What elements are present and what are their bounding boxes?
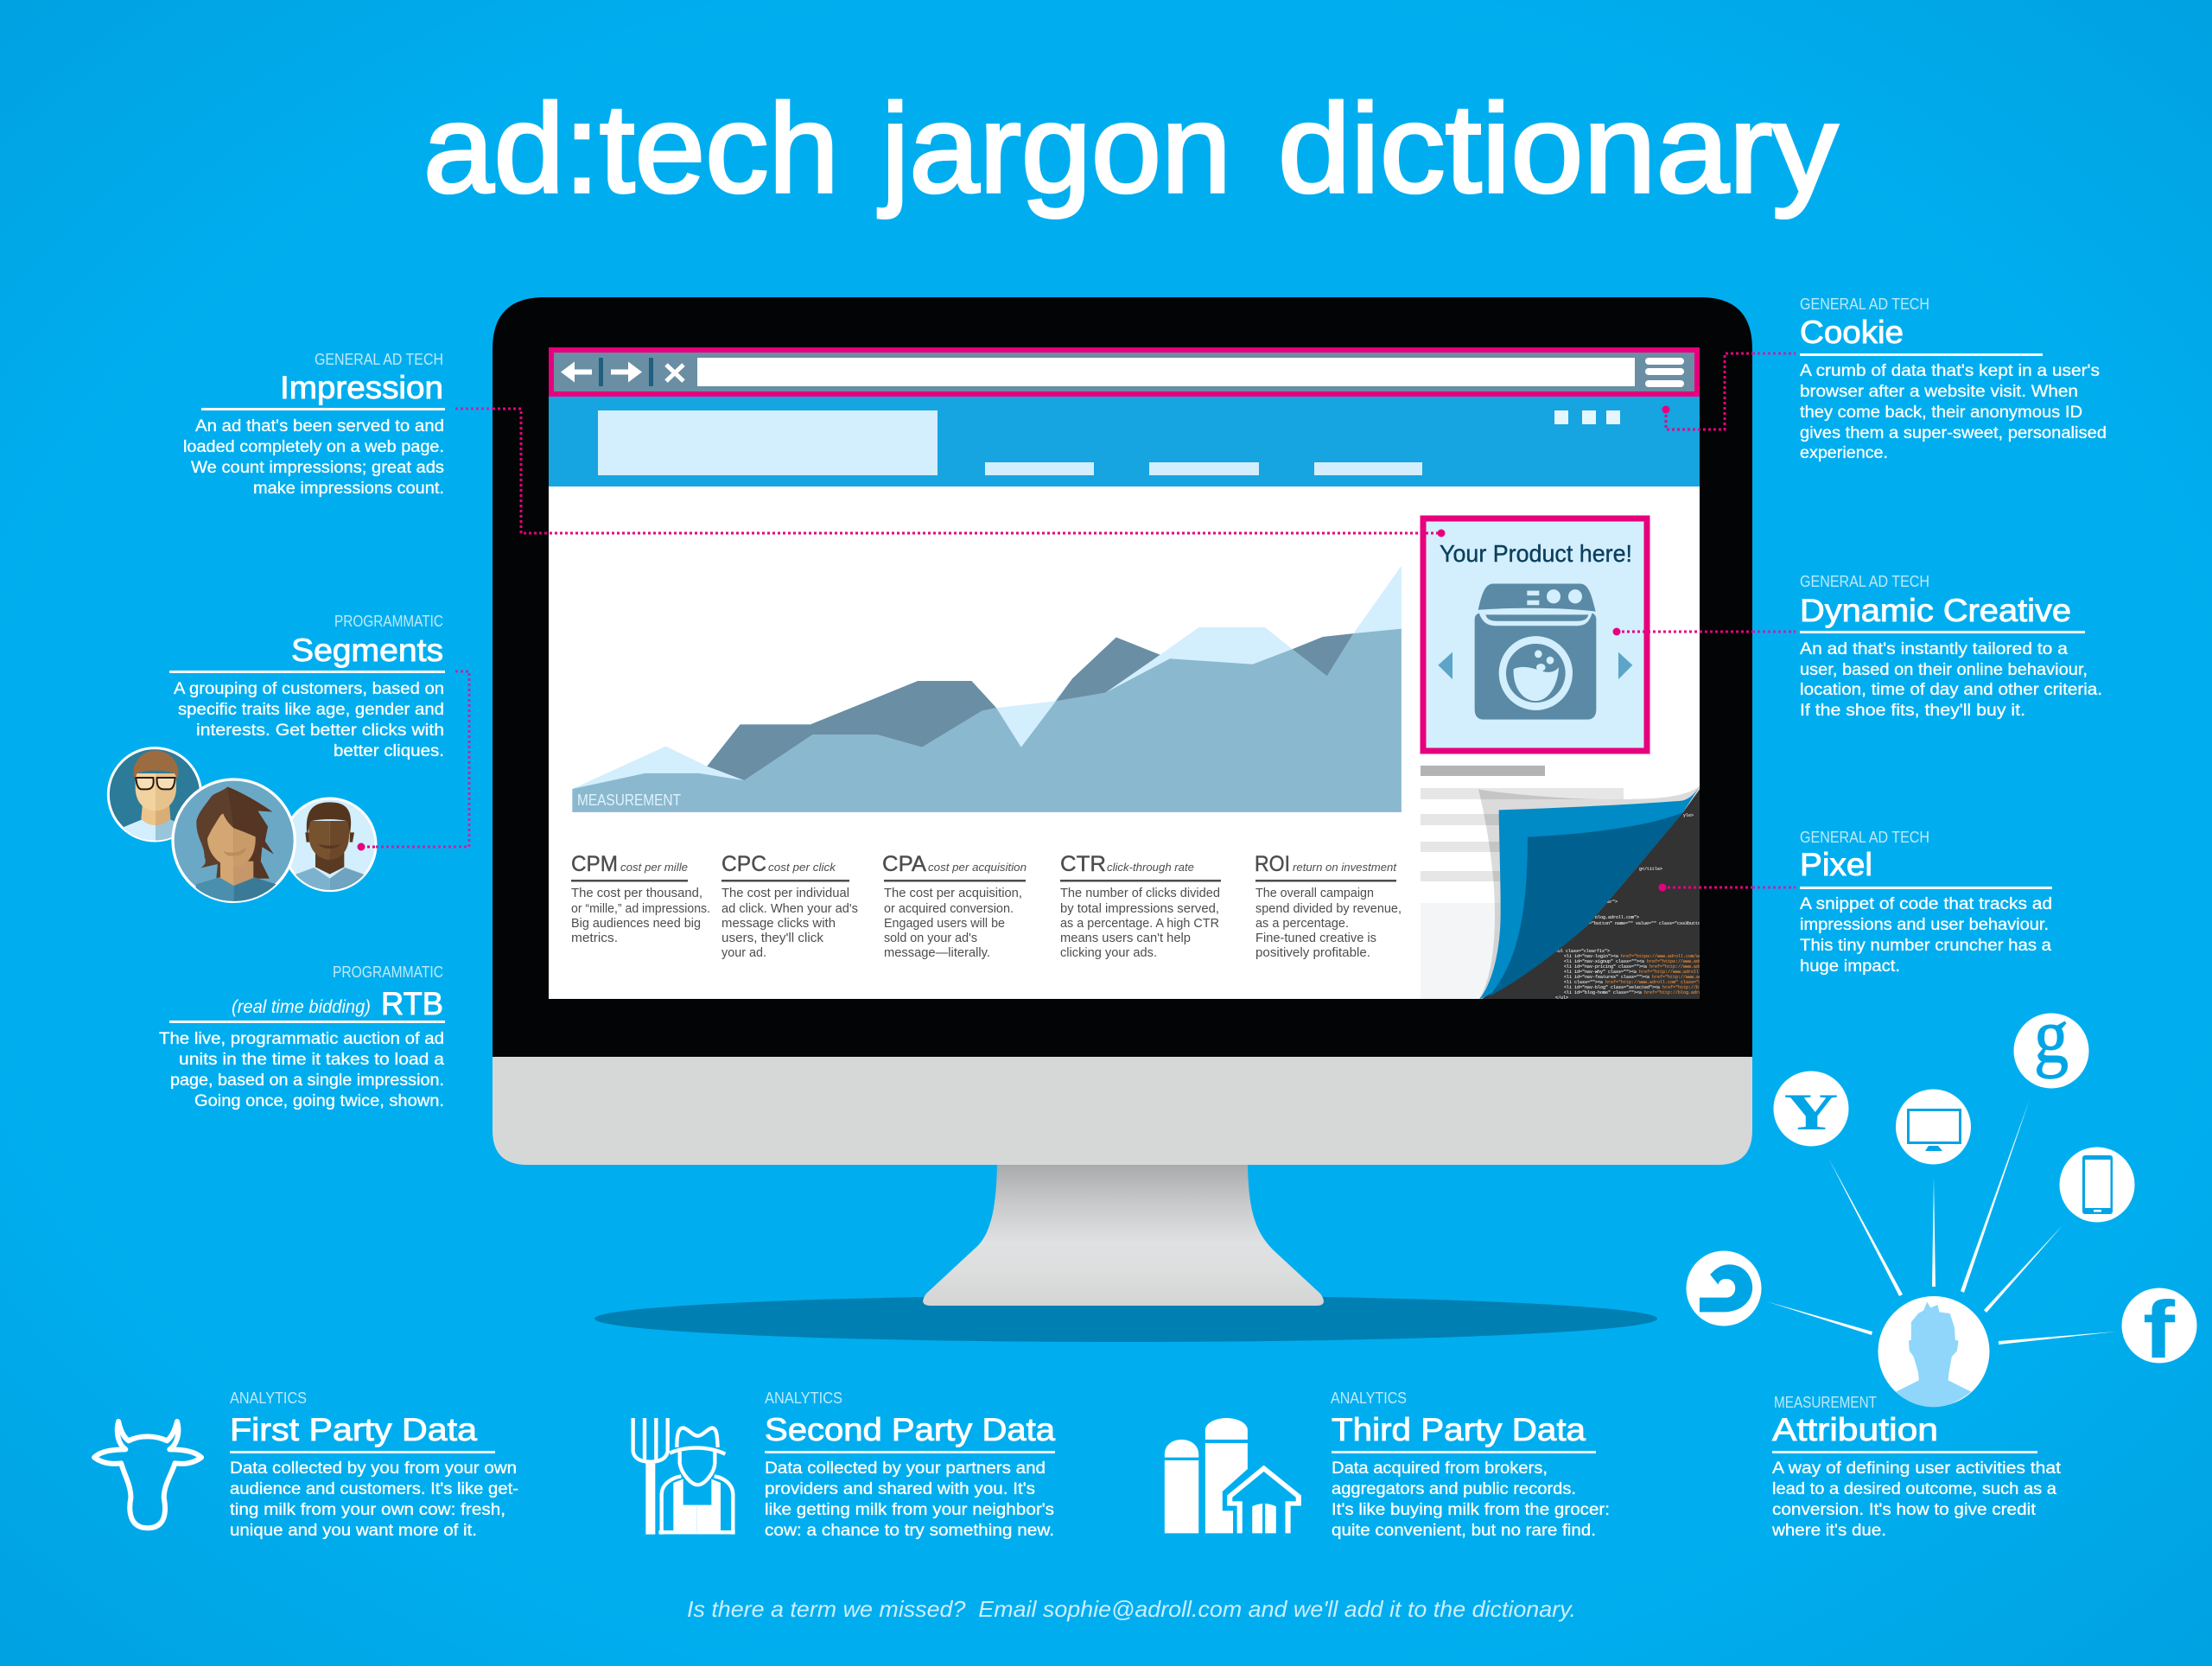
definition: Dynamic Creative: An ad that's instantly tailored to a bbox=[1800, 640, 2068, 658]
definition: Cookie: browser after a website visit. When bbox=[1800, 383, 2078, 401]
definition: Third Party Data: quite convenient, but no rare find. bbox=[1332, 1522, 1596, 1540]
metric: ROI: Fine-tuned creative is bbox=[1255, 932, 1376, 945]
metric: CPA: message—literally. bbox=[884, 946, 990, 960]
metric: CTR: means users can't help bbox=[1060, 932, 1191, 945]
metric: CPC bbox=[721, 852, 858, 960]
footer note: Is there a term we missed? Email sophie@adroll.com and we'll add it to the dictionary. bbox=[687, 1596, 1576, 1622]
icon: farmer with pitchfork bbox=[633, 1418, 735, 1535]
definition: Cookie: Cookie bbox=[1800, 315, 1904, 350]
code snippet: <li id="nav-pricing" class=""><a href="http://www.adroll bbox=[1564, 964, 1709, 970]
code snippet: g</title> bbox=[1639, 867, 1662, 872]
definition: Attribution: where it's due. bbox=[1771, 1522, 1886, 1540]
definition: Segments: better cliques. bbox=[334, 742, 444, 760]
icon: cow bbox=[94, 1421, 201, 1528]
metric: CPC: cost per click bbox=[768, 861, 837, 874]
metric: CTR: by total impressions served, bbox=[1060, 902, 1219, 916]
dynamic ad unit bbox=[1423, 518, 1647, 751]
monitor stand bbox=[923, 1165, 1324, 1306]
icon: Facebook bbox=[2122, 1284, 2196, 1375]
metric: CPM: metrics. bbox=[571, 932, 618, 945]
title: jargon bbox=[878, 78, 1231, 219]
curled page flap bbox=[1479, 785, 1700, 1000]
code snippet: //blog.adroll.com"> bbox=[1590, 915, 1639, 920]
definition: Dynamic Creative: GENERAL AD TECH bbox=[1800, 573, 1929, 590]
definition: Cookie bbox=[1800, 296, 2107, 462]
definition: Second Party Data: Data collected by your partners and bbox=[765, 1459, 1046, 1478]
definition: Second Party Data: providers and shared with you. It's bbox=[765, 1480, 1035, 1498]
metric: CPM: Big audiences need big bbox=[571, 917, 701, 931]
metric: CPC: CPC bbox=[721, 852, 766, 876]
code snippet: yle> bbox=[1683, 813, 1694, 818]
nav items bbox=[985, 462, 1422, 475]
definition: RTB: units in the time it takes to load a bbox=[179, 1051, 444, 1069]
definition: Dynamic Creative: If the shoe fits, they'll buy it. bbox=[1800, 702, 2025, 720]
icon: Facebook: f bbox=[2143, 1284, 2176, 1375]
avatar: man in light circle bbox=[283, 798, 376, 893]
metric: CPA bbox=[882, 852, 1027, 960]
metric: CPA: cost per acquisition bbox=[928, 861, 1027, 874]
code snippet: <li id="nav-login"><a href="https://www.adroll.com/acc bbox=[1564, 954, 1704, 959]
sidebar text placeholders bbox=[1421, 766, 1624, 999]
definition: First Party Data: unique and you want more of it. bbox=[230, 1522, 477, 1540]
avatar: woman bbox=[173, 779, 295, 903]
illustration: audience avatars bbox=[108, 748, 376, 903]
icon: user silhouette bbox=[1878, 1296, 1989, 1407]
title: dictionary bbox=[1278, 78, 1838, 219]
metric: CTR: The number of clicks divided bbox=[1060, 887, 1220, 900]
connector lines bbox=[1766, 1099, 2116, 1345]
logo block bbox=[598, 410, 938, 475]
code snippet: ype="button" name="" value="" class="css3button" bbox=[1581, 921, 1706, 926]
definition: Impression: Impression bbox=[280, 370, 443, 405]
definition: Second Party Data bbox=[765, 1389, 1055, 1540]
metric: ROI: ROI bbox=[1255, 852, 1290, 876]
browser toolbar bbox=[551, 350, 1697, 394]
definition: Attribution: MEASUREMENT bbox=[1774, 1394, 1877, 1411]
definition: Segments: Segments bbox=[291, 633, 443, 668]
code snippet: <li class=""><a href="http://www.adroll.com" class="st bbox=[1564, 980, 1704, 985]
metric: CPC: users, they'll click bbox=[721, 932, 824, 945]
definition: Third Party Data: It's like buying milk from the grocer: bbox=[1332, 1501, 1610, 1519]
definition: First Party Data bbox=[230, 1389, 518, 1540]
code snippet: <li id="nav-why" class=""><a href="http://www.adroll.com bbox=[1564, 970, 1709, 975]
definition: Pixel: Pixel bbox=[1800, 847, 1872, 882]
metric: CPM bbox=[571, 852, 710, 945]
title bbox=[423, 78, 1838, 219]
metric: CPC: your ad. bbox=[721, 946, 766, 960]
metric: CPA: or acquired conversion. bbox=[884, 902, 1014, 916]
definition: Dynamic Creative: user, based on their online behaviour, bbox=[1800, 661, 2088, 679]
definition: Third Party Data: ANALYTICS bbox=[1331, 1389, 1407, 1407]
definition: Cookie: they come back, their anonymous ID bbox=[1800, 404, 2082, 422]
definition: Attribution: conversion. It's how to give credit bbox=[1772, 1501, 2037, 1519]
icon: desktop bbox=[1896, 1089, 1971, 1165]
metric: ROI: spend divided by revenue, bbox=[1255, 902, 1402, 916]
icon: washing machine bbox=[1438, 583, 1632, 720]
definition: Impression: make impressions count. bbox=[253, 480, 444, 498]
definition: Second Party Data: ANALYTICS bbox=[765, 1389, 842, 1407]
metric: CTR: clicking your ads. bbox=[1060, 946, 1157, 960]
metric: CPA: The cost per acquisition, bbox=[884, 887, 1022, 900]
definition: RTB: page, based on a single impression. bbox=[170, 1071, 444, 1090]
attribution diagram bbox=[1687, 994, 2196, 1407]
metric: CPC: message clicks with bbox=[721, 917, 836, 931]
code snippet: ear"> bbox=[1605, 900, 1618, 905]
definition: First Party Data: ANALYTICS bbox=[230, 1389, 307, 1407]
avatar: man with glasses bbox=[108, 748, 201, 843]
connector: segments bbox=[358, 671, 469, 850]
definition: Cookie: A crumb of data that's kept in a user's bbox=[1800, 362, 2100, 380]
definition: Dynamic Creative bbox=[1800, 573, 2102, 720]
definition: Attribution bbox=[1771, 1394, 2062, 1540]
metric: CPA: Engaged users will be bbox=[884, 917, 1005, 931]
icon: Google: g bbox=[2034, 994, 2069, 1079]
definition: Second Party Data: cow: a chance to try something new. bbox=[765, 1522, 1054, 1540]
definition: Pixel: GENERAL AD TECH bbox=[1800, 829, 1929, 846]
connector: dynamic creative bbox=[1612, 627, 1796, 636]
metric: ROI bbox=[1255, 852, 1402, 960]
area chart bbox=[572, 566, 1402, 812]
toolbar separators bbox=[599, 358, 653, 386]
definition: RTB: Going once, going twice, shown. bbox=[194, 1092, 444, 1110]
definition: Third Party Data: Third Party Data bbox=[1332, 1412, 1586, 1447]
definition: Segments: PROGRAMMATIC bbox=[334, 613, 443, 630]
code snippet: <li id="blog-home" class=""><a href="http://blog.adroll bbox=[1564, 990, 1707, 995]
metric: ROI: as a percentage. bbox=[1255, 917, 1349, 931]
back arrow bbox=[561, 361, 592, 382]
metric: CTR: CTR bbox=[1060, 852, 1106, 876]
title: ad:tech bbox=[423, 78, 839, 219]
metric: CPC: The cost per individual bbox=[721, 887, 849, 900]
definition: Pixel: A snippet of code that tracks ad bbox=[1800, 895, 2052, 913]
definition: Impression: loaded completely on a web page. bbox=[183, 438, 444, 456]
metric: CPA: sold on your ad's bbox=[884, 932, 977, 945]
code snippet bbox=[1555, 813, 1709, 1001]
definition: Cookie: GENERAL AD TECH bbox=[1800, 296, 1929, 313]
connector: cookie bbox=[1662, 353, 1796, 429]
definition: RTB: RTB bbox=[381, 986, 443, 1021]
metric: CTR: as a percentage. A high CTR bbox=[1060, 917, 1219, 931]
definition: Pixel: huge impact. bbox=[1800, 957, 1900, 976]
connector: pixel bbox=[1659, 883, 1796, 892]
website header bbox=[549, 397, 1700, 486]
metric: CPM: The cost per thousand, bbox=[571, 887, 702, 900]
definition: Cookie: experience. bbox=[1800, 444, 1888, 462]
code snippet: <li id="nav-blog" class="selected"><a href="http://blo bbox=[1564, 985, 1704, 990]
definition: First Party Data: audience and customers. It's like get- bbox=[230, 1480, 518, 1498]
monitor shadow bbox=[594, 1295, 1657, 1342]
definition: Cookie: gives them a super-sweet, personalised bbox=[1800, 424, 2107, 442]
icon: silos and barn bbox=[1165, 1418, 1299, 1533]
definition: RTB bbox=[159, 963, 445, 1110]
definition: First Party Data: Data collected by you from your own bbox=[230, 1459, 517, 1478]
icon: phone bbox=[2060, 1148, 2134, 1222]
ad headline: Your Product here! bbox=[1440, 540, 1632, 567]
icon: Yahoo: Y bbox=[1783, 1084, 1839, 1141]
metric: CPC: ad click. When your ad's bbox=[721, 902, 858, 916]
close icon bbox=[666, 365, 683, 381]
definition: Impression: GENERAL AD TECH bbox=[315, 351, 443, 368]
definition: Segments: A grouping of customers, based on bbox=[174, 680, 444, 698]
code snippet: </ul> bbox=[1555, 995, 1568, 1001]
metric: CPM: or “mille,” ad impressions. bbox=[571, 902, 710, 916]
icon: Yahoo bbox=[1773, 1071, 1849, 1146]
definition: Segments: specific traits like age, gender and bbox=[178, 701, 444, 719]
definition: Pixel: impressions and user behaviour. bbox=[1800, 916, 2049, 934]
menu icon bbox=[1645, 358, 1684, 387]
code snippet: <li id="nav-signup" class=""><a href="https://www.adroll bbox=[1564, 959, 1709, 964]
definition: RTB: The live, programmatic auction of ad bbox=[159, 1030, 444, 1048]
definition: Second Party Data: Second Party Data bbox=[765, 1412, 1055, 1447]
code snippet: <ul class="clearfix"> bbox=[1555, 949, 1610, 954]
metric: CPM: cost per mille bbox=[620, 861, 688, 874]
definition: Attribution: lead to a desired outcome, such as a bbox=[1772, 1480, 2056, 1498]
metric: CPM: CPM bbox=[571, 852, 618, 876]
header squares bbox=[1554, 410, 1620, 424]
definition: RTB: (real time bidding) bbox=[232, 997, 371, 1017]
definition: Segments: interests. Get better clicks with bbox=[196, 722, 444, 740]
connector: impression bbox=[455, 409, 1445, 537]
definition: First Party Data: First Party Data bbox=[230, 1412, 477, 1447]
definition: Dynamic Creative: location, time of day and other criteria. bbox=[1800, 681, 2102, 699]
icon: Google bbox=[2013, 994, 2089, 1089]
monitor bbox=[493, 297, 1752, 1165]
chart label: MEASUREMENT bbox=[577, 792, 681, 809]
definition: Attribution: Attribution bbox=[1772, 1412, 1938, 1447]
definition: Segments bbox=[169, 613, 445, 760]
definition: Second Party Data: like getting milk from your neighbor's bbox=[765, 1501, 1054, 1519]
metric: ROI: return on investment bbox=[1293, 861, 1397, 874]
definition: First Party Data: ting milk from your own cow: fresh, bbox=[230, 1501, 505, 1519]
definition: Pixel bbox=[1800, 829, 2052, 976]
metric: CPA: CPA bbox=[882, 852, 926, 876]
carousel arrows bbox=[1438, 652, 1632, 679]
metric: ROI: positively profitable. bbox=[1255, 946, 1370, 960]
definition: Impression: We count impressions; great ads bbox=[191, 459, 444, 477]
icon: retargeting arrow bbox=[1687, 1251, 1761, 1326]
code snippet: <li id="nav-features" class=""><a href="http://www.adr bbox=[1564, 975, 1704, 980]
definition: Third Party Data: aggregators and public records. bbox=[1332, 1480, 1576, 1498]
definition: RTB: PROGRAMMATIC bbox=[333, 963, 443, 981]
definition: Third Party Data bbox=[1331, 1389, 1610, 1540]
forward arrow bbox=[611, 361, 642, 382]
definition: Dynamic Creative: Dynamic Creative bbox=[1800, 593, 2071, 628]
metric: CTR bbox=[1060, 852, 1221, 960]
definition: Impression bbox=[183, 351, 445, 498]
definition: Pixel: This tiny number cruncher has a bbox=[1800, 937, 2051, 955]
metric: CTR: click-through rate bbox=[1107, 861, 1194, 874]
definition: Attribution: A way of defining user activities that bbox=[1772, 1459, 2062, 1478]
definition: Third Party Data: Data acquired from brokers, bbox=[1332, 1459, 1548, 1478]
definition: Impression: An ad that's been served to and bbox=[195, 417, 444, 436]
metric: ROI: The overall campaign bbox=[1255, 887, 1374, 900]
address bar bbox=[697, 358, 1635, 386]
page curl revealing code bbox=[1478, 785, 1709, 1001]
